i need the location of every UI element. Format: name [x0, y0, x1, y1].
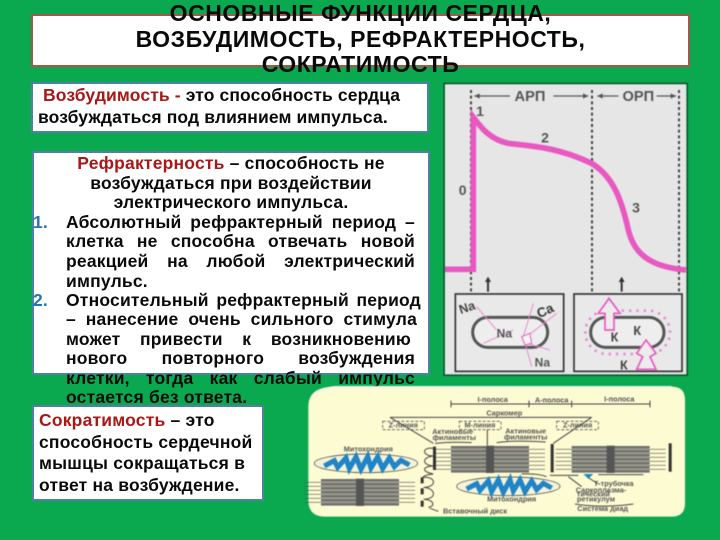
myofibril bundles [435, 446, 545, 473]
contractility definition: Сократимость – это [39, 410, 215, 430]
action potential curve [445, 117, 686, 270]
phase numbers: 0 [459, 182, 467, 198]
inset: sodium and calcium channels [455, 294, 564, 371]
list number 2: 2. [33, 290, 48, 310]
diagram: cardiac muscle ultrastructure [304, 385, 686, 518]
chart: action potential [442, 82, 688, 376]
contractility definition: ответ на возбуждение. [39, 475, 240, 495]
excitability definition: возбуждаться под влиянием импульса. [38, 107, 388, 127]
title: ОСНОВНЫЕ ФУНКЦИИ СЕРДЦА, [170, 0, 551, 26]
title box [31, 14, 690, 67]
diagram labels: Z-линия [563, 421, 592, 430]
diagram labels: А-полоса [535, 395, 569, 404]
diagram labels: Вставочный диск [443, 506, 507, 515]
inset: potassium channels: К [633, 324, 641, 338]
inset: sodium and calcium channels: Na [497, 326, 512, 340]
diagram labels: І-полоса [604, 395, 635, 404]
diagram labels: Z-линия [389, 421, 418, 430]
refractoriness text [33, 153, 421, 407]
diagram labels: Система диад [577, 504, 628, 513]
excitability definition: Возбудимость - это способность сердца [43, 85, 400, 105]
diagram labels: Митохондрия [344, 445, 393, 454]
phase numbers: 1 [476, 103, 484, 119]
relative refractory period: может привести к возникновению [66, 329, 411, 349]
diagram labels: Саркоплазма- [576, 485, 627, 494]
inset: potassium channels: К [611, 331, 619, 345]
relative refractory period: нового повторного возбуждения [66, 348, 415, 368]
absolute refractory period: клетка не способна отвечать новой [66, 231, 415, 251]
diagram labels: Саркомер [486, 409, 523, 418]
diagram labels: Актиновые [432, 427, 473, 436]
period labels: АРП [515, 89, 545, 105]
diagram labels: Митохондрия [487, 494, 536, 503]
panel: excitability [31, 82, 429, 133]
dashed label boxes [383, 421, 598, 430]
diagram labels: филаменты [504, 432, 547, 441]
diagram labels: Актиновые [505, 427, 546, 436]
excitability definition [38, 85, 400, 127]
diagram labels: М-линия [465, 421, 495, 430]
relative refractory period: остается без ответа. [66, 387, 247, 407]
band dimension lines [390, 401, 650, 511]
absolute refractory period: Абсолютный рефрактерный период – [66, 212, 415, 232]
contractility definition: мышцы сокращаться в [39, 453, 245, 473]
phase numbers: 3 [632, 200, 640, 216]
relative refractory period: клетки, тогда как слабый импульс [66, 368, 415, 388]
diagram labels: тический [577, 490, 610, 499]
inset: potassium channels [574, 294, 682, 372]
phase numbers [459, 103, 640, 216]
absolute refractory period [66, 212, 415, 291]
inset: sodium and calcium channels: Na [535, 356, 550, 370]
title: ВОЗБУДИМОСТЬ, РЕФРАКТЕРНОСТЬ, [136, 26, 585, 52]
inset: potassium channels: К [620, 358, 628, 372]
refractoriness text: электрического импульса. [114, 192, 348, 212]
panel: contractility [32, 405, 264, 501]
contractility definition: способность сердечной [39, 432, 252, 452]
period labels: ОРП [622, 89, 654, 105]
stimulus arrows [485, 277, 625, 292]
diagram labels: филаменты [433, 433, 476, 442]
refractoriness text: возбуждаться при воздействии [90, 173, 372, 193]
relative refractory period: Относительный рефрактерный период [66, 290, 421, 310]
relative refractory period [66, 290, 421, 407]
title [136, 0, 585, 77]
diagram labels [344, 395, 635, 515]
inset: sodium and calcium channels: Na [457, 298, 478, 317]
phase numbers: 2 [541, 130, 549, 146]
absolute refractory period: реакцией на любой электрический [66, 251, 415, 271]
intercalated discs [421, 443, 672, 507]
panel: refractoriness background [32, 151, 430, 375]
contractility definition [39, 410, 252, 495]
absolute refractory period: импульс. [66, 271, 148, 291]
period labels [474, 89, 676, 105]
title: СОКРАТИМОСТЬ [262, 51, 459, 77]
refractoriness definition: Рефрактерность – способность не [77, 153, 385, 173]
diagram labels: Т-трубочка [594, 479, 634, 488]
mitochondria [314, 454, 418, 473]
diagram labels: І-полоса [477, 395, 509, 404]
relative refractory period: – нанесение очень сильного стимула [66, 309, 417, 329]
inset: sodium and calcium channels: Ca [534, 300, 557, 321]
diagram labels: ретикулум [577, 494, 615, 503]
list number 1: 1. [33, 212, 48, 232]
